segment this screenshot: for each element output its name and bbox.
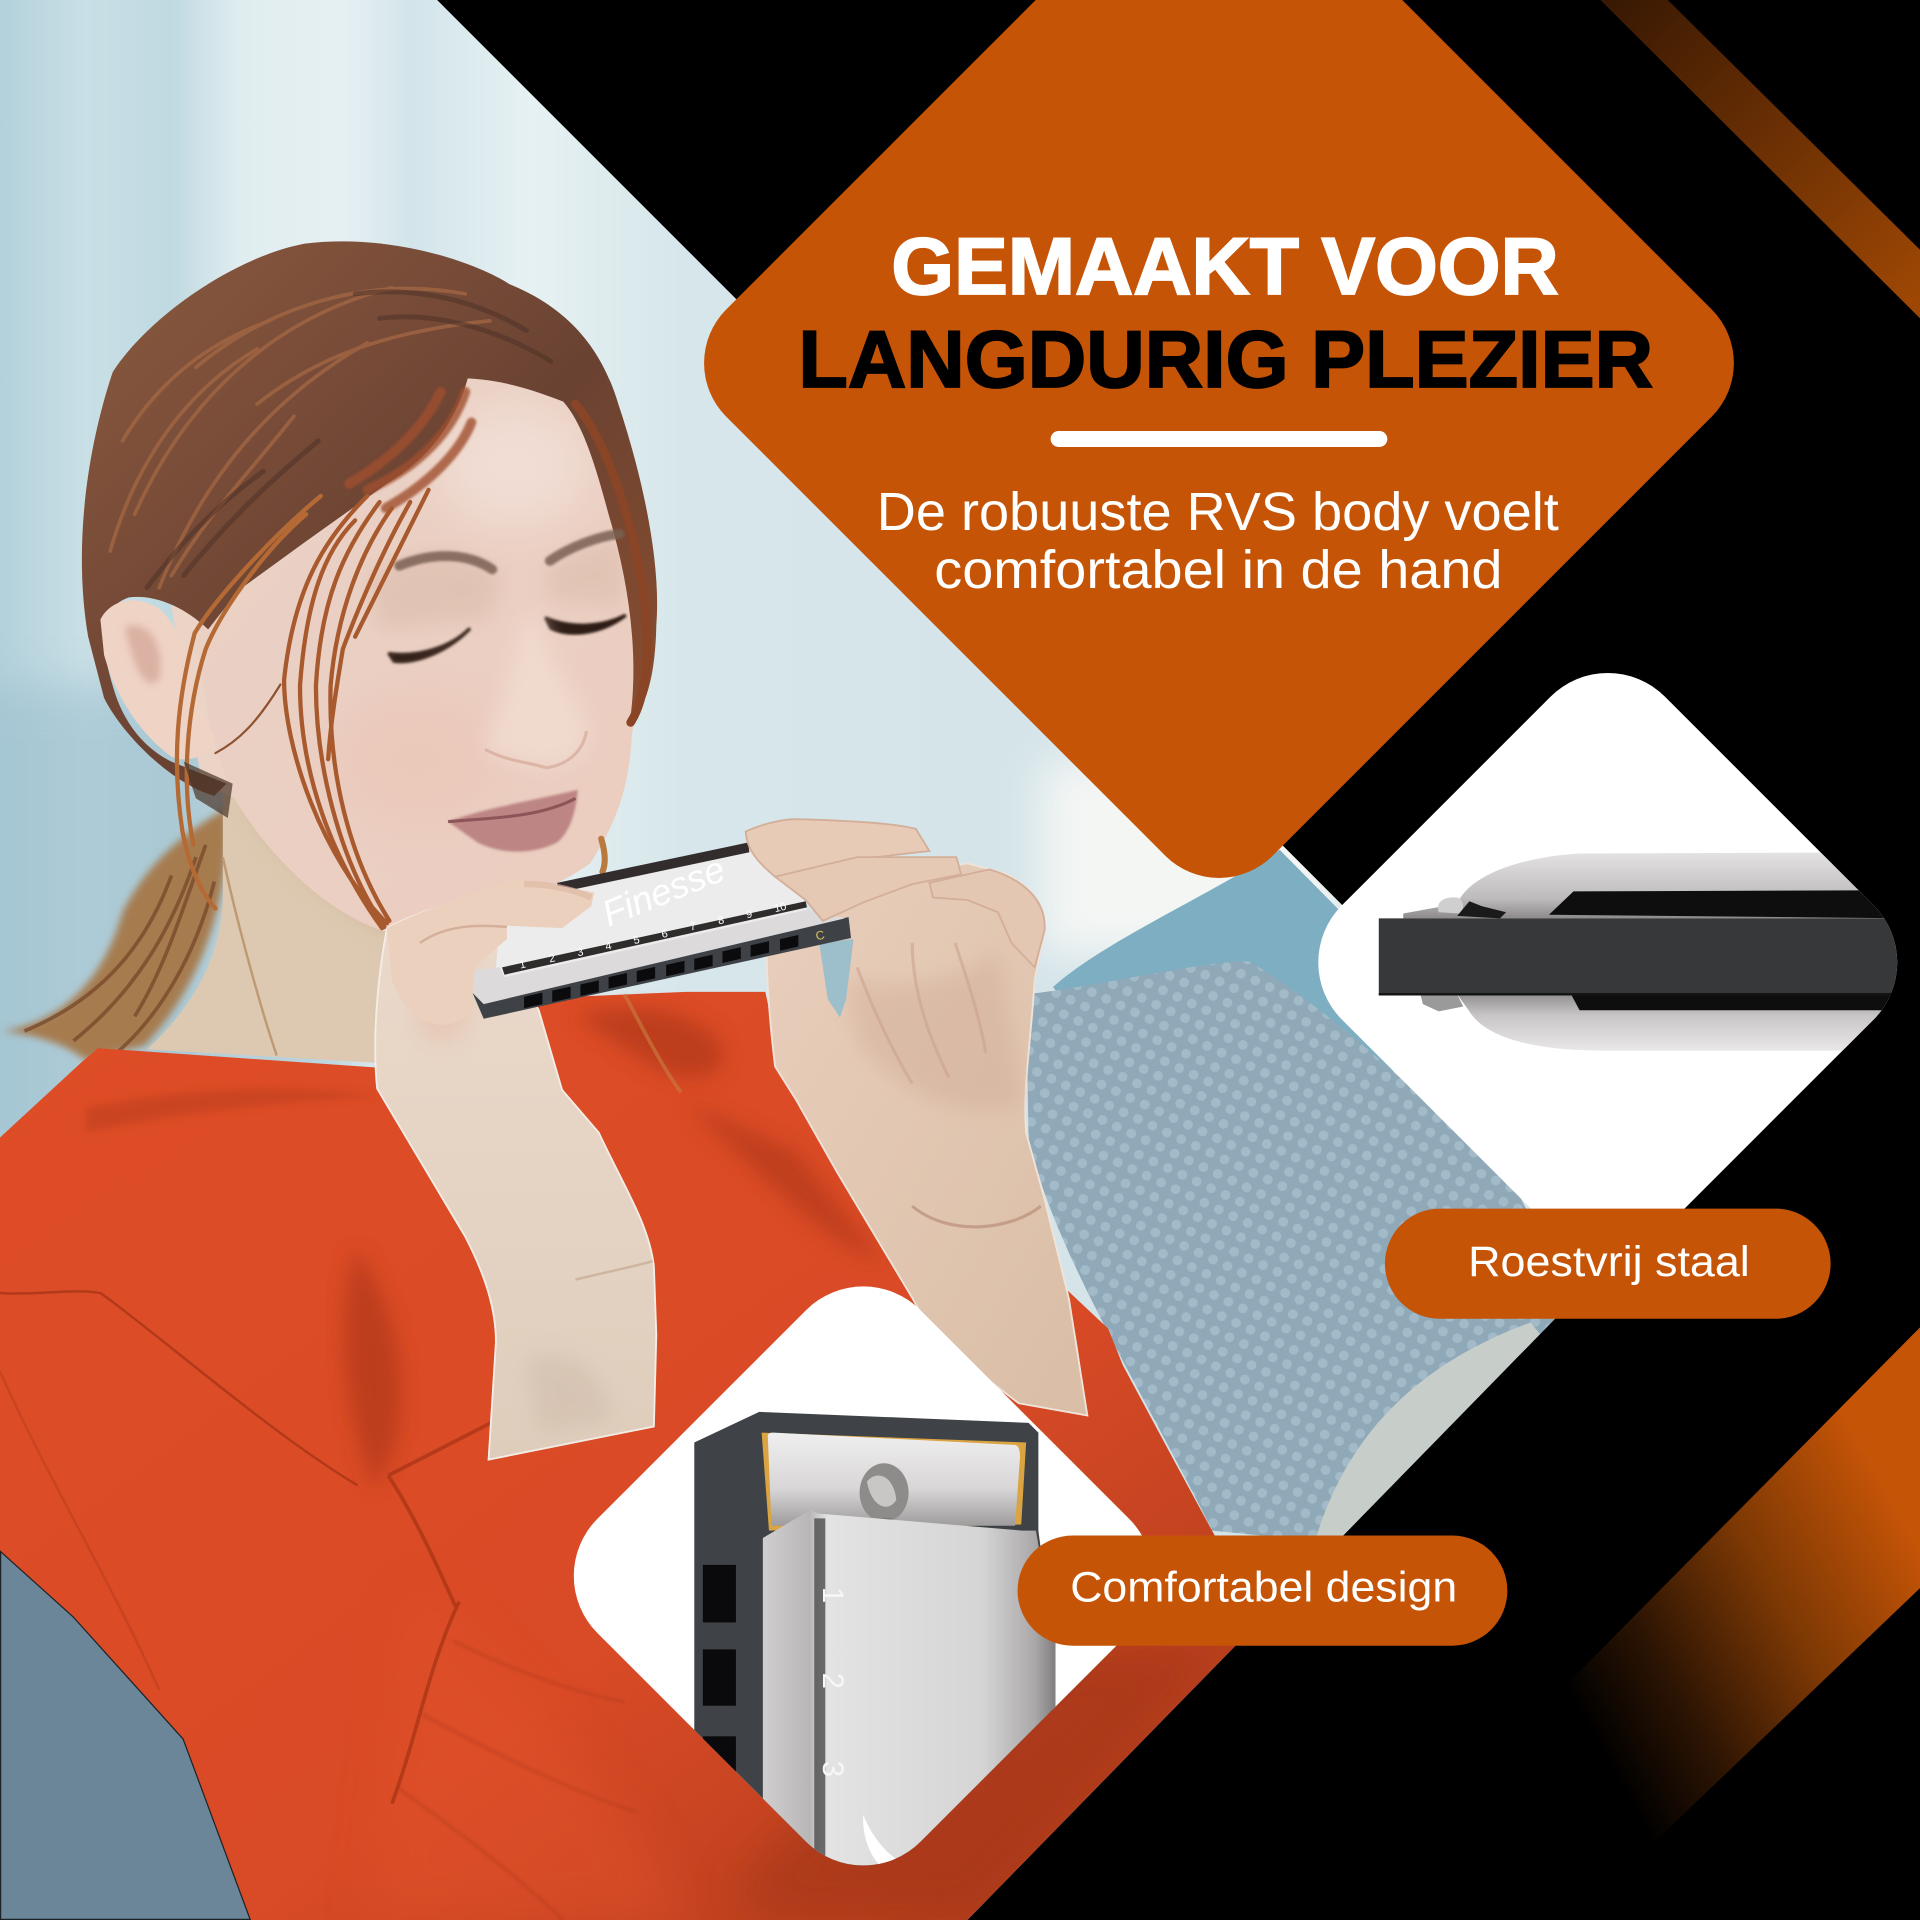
key letter: C [814, 928, 826, 943]
harmonica brand and numbers: 3 [576, 946, 585, 959]
hair texture strands [110, 288, 551, 588]
orange headline diamond [673, 0, 1765, 909]
heading line two: LANGDURIG PLEZIER [798, 315, 1653, 405]
harmonica brand and numbers [518, 848, 788, 971]
harmonica brand and numbers: 9 [745, 908, 754, 921]
left fingers over harmonica [387, 878, 594, 1025]
hole row [524, 935, 798, 1008]
pill label: Roestvrij staal [1385, 1209, 1831, 1319]
neck [147, 793, 386, 1063]
harmonica comb [473, 917, 851, 1019]
left forearm and hand [375, 888, 656, 1460]
harmonica brand and numbers: 8 [717, 914, 725, 927]
harmonica brand and numbers: 4 [604, 940, 613, 953]
pill label: Comfortabel design [1018, 1536, 1507, 1646]
gradient stripe top right [1600, 0, 1920, 318]
harmonica brand and numbers: 1 [518, 958, 527, 971]
harmonica brand and numbers: 2 [548, 952, 556, 965]
sofa seat lower left [0, 1550, 251, 1920]
dark number line [502, 901, 807, 975]
gradient stripe bottom right [1567, 1327, 1920, 1853]
nose [485, 612, 588, 768]
harmonica end view [1379, 852, 1910, 1051]
white diamond: front view of harmonica [540, 1253, 1186, 1910]
harmonica end-on view: 2 [816, 1673, 849, 1689]
ponytail [2, 808, 227, 1060]
lower plate [473, 910, 845, 1004]
harmonica brand and numbers: 5 [632, 934, 641, 947]
harmonica brand and numbers: 7 [689, 920, 697, 934]
sofa back and cushion [1026, 850, 1592, 1543]
eyebrows [399, 534, 620, 569]
subtitle [877, 482, 1559, 600]
temple skin behind the ear [172, 606, 234, 798]
harmonica brand and numbers: Finesse [596, 848, 731, 934]
harmonica top cover [496, 842, 807, 991]
subtitle: De robuuste RVS body voelt [877, 482, 1559, 542]
hair side and fringe strands [177, 404, 647, 928]
harmonica brand and numbers: 10 [773, 901, 788, 915]
harmonica end-on view: 1 [816, 1587, 849, 1603]
heading divider [1051, 431, 1387, 447]
dark upper slot [557, 842, 749, 893]
shadow behind ear [184, 762, 233, 818]
hair mass [82, 241, 657, 796]
pill label: Comfortabel design: Comfortabel design [1070, 1564, 1457, 1612]
closed eyes [389, 616, 624, 662]
right hand and wrist [767, 863, 1087, 1416]
heading line one: GEMAAKT VOOR [891, 222, 1559, 312]
lips [448, 790, 578, 852]
harmonica end-on view [694, 1412, 1056, 1910]
pill label: Roestvrij staal: Roestvrij staal [1468, 1238, 1750, 1286]
gap between thumb and fingers [819, 939, 853, 1018]
face [234, 378, 634, 932]
ear [100, 600, 198, 760]
harmonica end-on view: 3 [816, 1761, 849, 1777]
harmonica brand and numbers: 6 [660, 928, 669, 941]
diamond background [1285, 639, 1920, 1285]
harmonica held in hands [473, 842, 851, 1019]
diamond background [540, 1253, 1186, 1899]
white diamond: side view of harmonica [1285, 639, 1920, 1285]
right fingers over harmonica [746, 819, 1045, 967]
subtitle: comfortabel in de hand [934, 540, 1502, 600]
red sweater [0, 992, 1237, 1920]
